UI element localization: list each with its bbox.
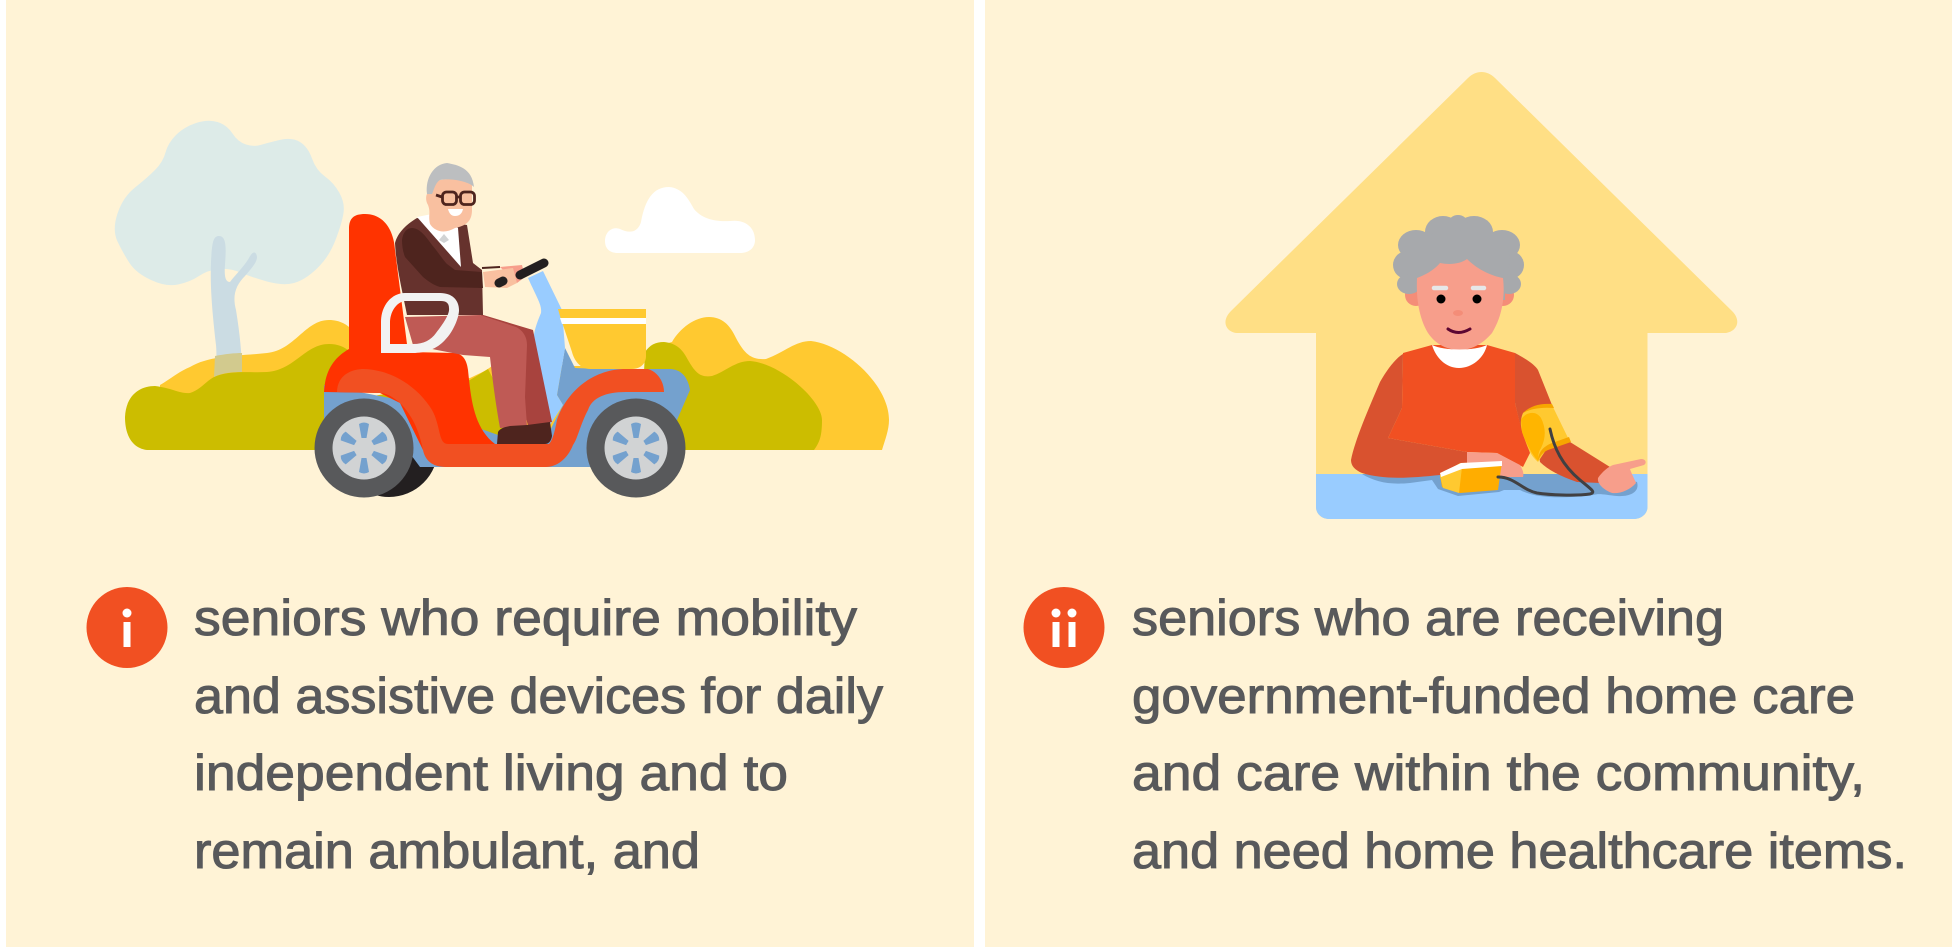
house	[1225, 72, 1737, 519]
trousers	[480, 314, 552, 426]
table shadows	[1362, 474, 1638, 497]
number badge i	[86, 587, 168, 668]
torso and collar	[1388, 345, 1530, 467]
panel: right	[985, 0, 1952, 947]
right hand	[1598, 459, 1646, 493]
text block: right: and need home healthcare items.	[1132, 823, 1907, 879]
text block: right	[1132, 590, 1907, 879]
hand	[483, 268, 517, 288]
orange fender and floor	[337, 369, 664, 467]
glasses	[436, 192, 474, 204]
illustration: senior on mobility scooter	[115, 121, 889, 497]
illustration: senior woman in house	[1225, 72, 1737, 519]
text block: left: independent living and to	[194, 745, 788, 801]
text block: left: and assistive devices for daily	[194, 668, 883, 724]
text block: right: government-funded home care	[1132, 668, 1855, 724]
head	[426, 179, 472, 231]
text block: left: remain ambulant, and	[194, 823, 700, 879]
text block: right: and care within the community,	[1132, 745, 1865, 801]
pink hand	[500, 265, 525, 283]
icon: bushes	[125, 317, 889, 450]
monitor device	[1440, 461, 1502, 493]
front wheel right	[586, 398, 686, 498]
seat and red body	[324, 214, 495, 450]
panel: left	[6, 0, 974, 947]
ears	[1405, 284, 1427, 306]
sleeve line	[482, 267, 500, 268]
handle	[499, 263, 544, 283]
text block: right: seniors who are receiving	[1132, 590, 1724, 646]
icon: tree	[115, 121, 344, 377]
hair	[427, 163, 474, 194]
jacket	[395, 218, 483, 315]
blood pressure cuff	[1521, 404, 1571, 462]
face	[1417, 259, 1504, 350]
jacket arm	[402, 228, 483, 288]
steering column	[528, 271, 565, 425]
cuff tube	[1498, 429, 1593, 495]
hair	[1393, 215, 1524, 300]
left hand	[1467, 452, 1523, 477]
smile	[448, 209, 463, 216]
number badge ii	[1024, 587, 1104, 668]
text block: left: seniors who require mobility	[194, 590, 857, 646]
left sleeve	[1351, 354, 1467, 478]
collar	[1432, 345, 1487, 368]
scooter	[314, 163, 690, 498]
shirt	[417, 213, 461, 267]
woman	[1351, 215, 1646, 495]
basket	[558, 309, 646, 369]
scooter rear blue body	[324, 348, 690, 467]
back wheel	[340, 399, 438, 497]
armrest	[381, 293, 459, 353]
senior man	[395, 163, 552, 444]
table	[1316, 474, 1648, 519]
icon: cloud	[605, 187, 755, 253]
text block: left	[194, 590, 883, 879]
front wheel left	[314, 398, 414, 498]
shoes	[497, 422, 552, 444]
right sleeve	[1515, 353, 1552, 430]
